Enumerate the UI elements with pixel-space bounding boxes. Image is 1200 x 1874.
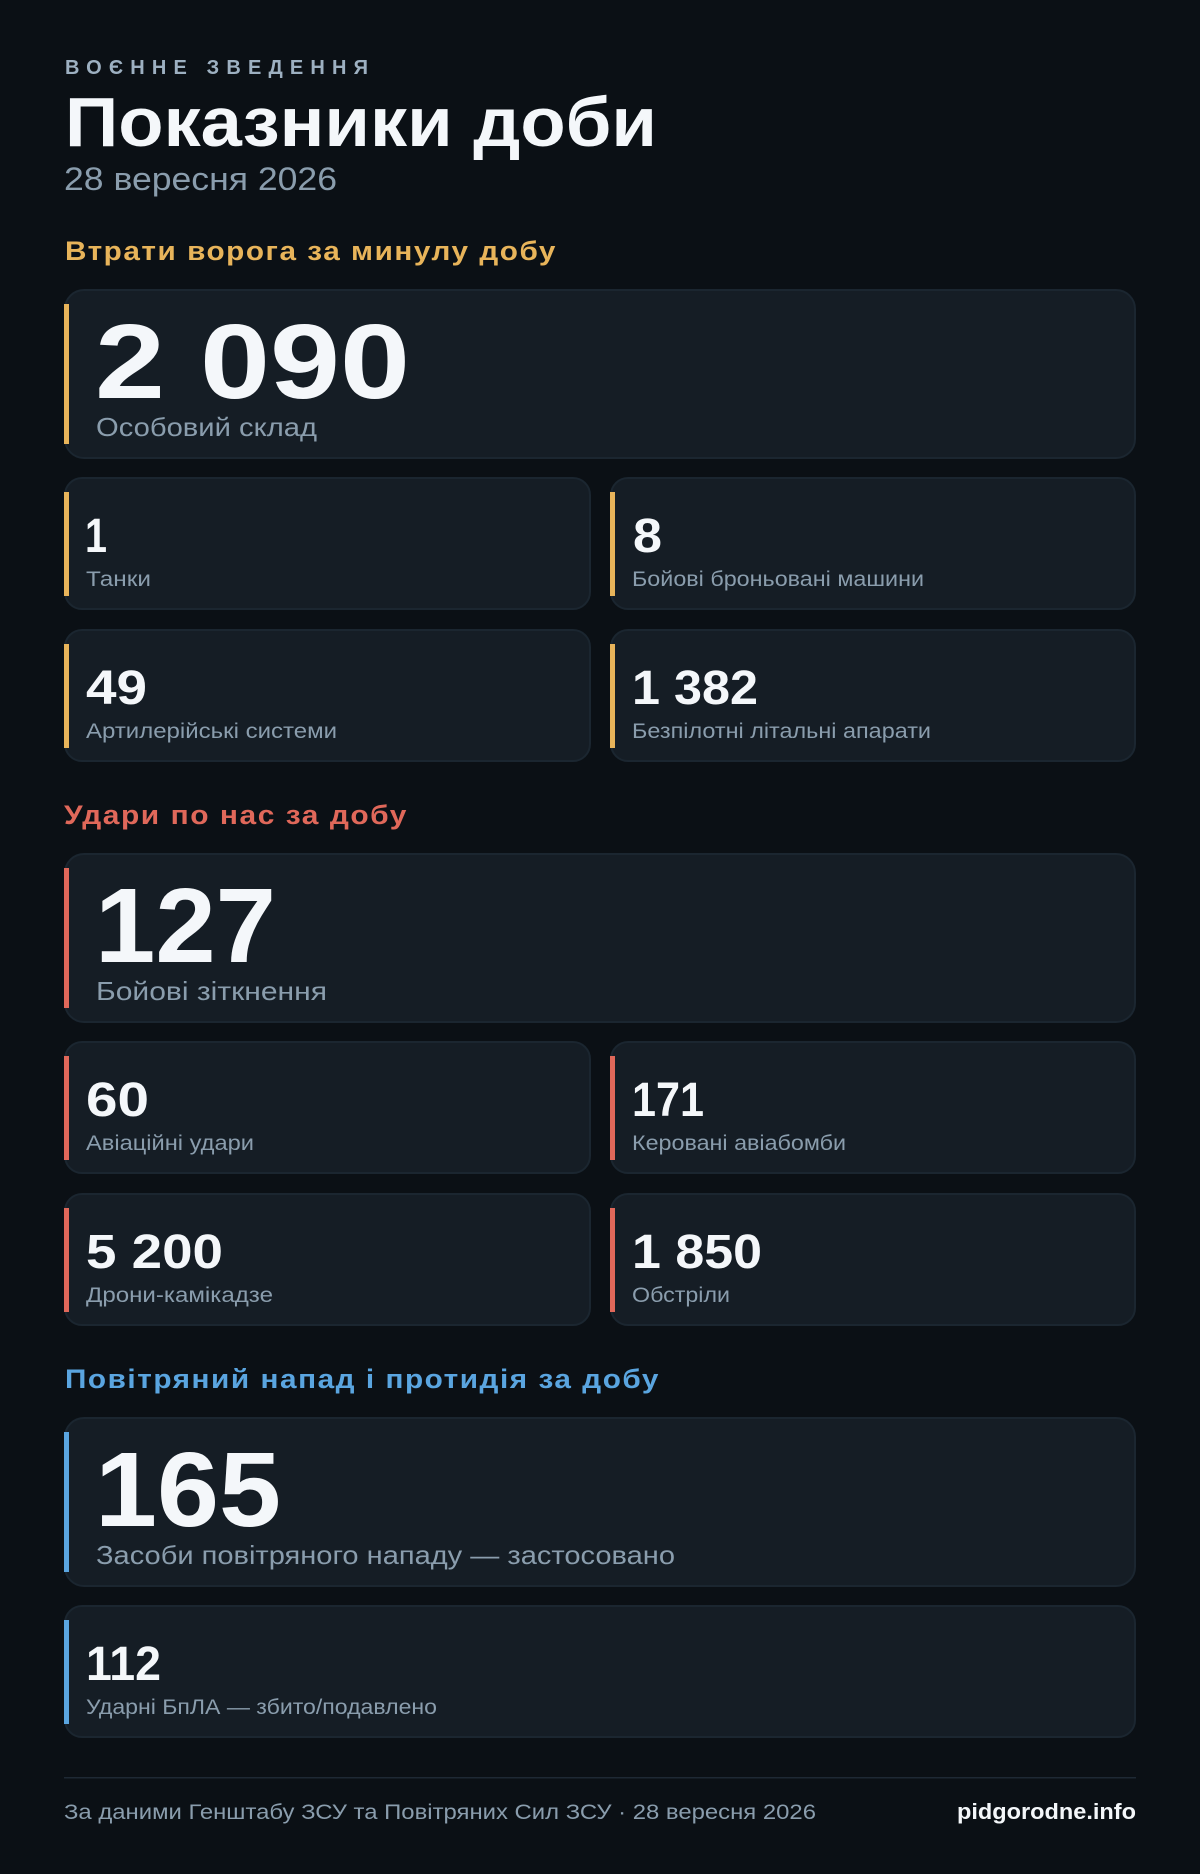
panel: artillery [64,630,590,761]
panel: air strikes [64,1042,590,1173]
site name: pidgorodne.info [957,1799,1136,1824]
source note: За даними Генштабу ЗСУ та Повітряних Сил ЗСУ · 28 вересня 2026 [64,1801,816,1824]
panel: combat clashes [64,854,1135,1022]
panel: air attack means: 165 [95,1431,281,1549]
panel: UAVs [610,630,1135,761]
panel: artillery: 49 [86,662,147,715]
panel: kamikaze drones: Дрони-камікадзе [86,1284,273,1307]
panel: strike UAVs [64,1606,1135,1737]
panel: shelling [610,1194,1135,1325]
date: 28 вересня 2026 [64,161,337,197]
eyebrow: ВОЄННЕ ЗВЕДЕННЯ [65,57,368,79]
panel: strike UAVs: Ударні БпЛА — збито/подавлено [86,1696,437,1719]
section heading: strikes: Удари по нас за добу [64,800,408,830]
panel: personnel: Особовий склад [96,412,317,442]
panel: guided bombs: Керовані авіабомби [632,1132,846,1155]
panel: air strikes: Авіаційні удари [86,1132,254,1155]
panel: armored vehicles: Бойові броньовані машини [632,568,924,591]
panel: combat clashes: Бойові зіткнення [96,976,327,1006]
panel: kamikaze drones [64,1194,590,1325]
panel: armored vehicles: 8 [633,510,662,563]
panel: armored vehicles [610,478,1135,609]
section heading: enemy losses: Втрати ворога за минулу добу [65,236,557,266]
header [64,57,657,197]
panel: strike UAVs: 112 [86,1638,161,1691]
panel: tanks [64,478,590,609]
panel: air attack means [64,1418,1135,1586]
panel: guided bombs [610,1042,1135,1173]
panel: tanks: 1 [85,510,107,563]
panel: shelling: 1 850 [632,1226,762,1279]
section heading: air attack: Повітряний напад і протидія за добу [65,1364,660,1394]
panel: air strikes: 60 [86,1074,149,1127]
title: Показники доби [65,83,657,161]
panel: kamikaze drones: 5 200 [86,1226,223,1279]
panel: personnel: 2 090 [95,303,410,421]
panel: artillery: Артилерійські системи [86,720,337,743]
panel: combat clashes: 127 [95,867,276,985]
panel: UAVs: Безпілотні літальні апарати [632,720,931,743]
panel: shelling: Обстріли [632,1284,730,1307]
footer [64,1799,1136,1824]
panel: UAVs: 1 382 [632,662,758,715]
panel: personnel [64,290,1135,458]
panel: tanks: Танки [86,568,151,591]
panel: guided bombs: 171 [632,1074,704,1127]
panel: air attack means: Засоби повітряного нападу — застосовано [96,1540,675,1570]
